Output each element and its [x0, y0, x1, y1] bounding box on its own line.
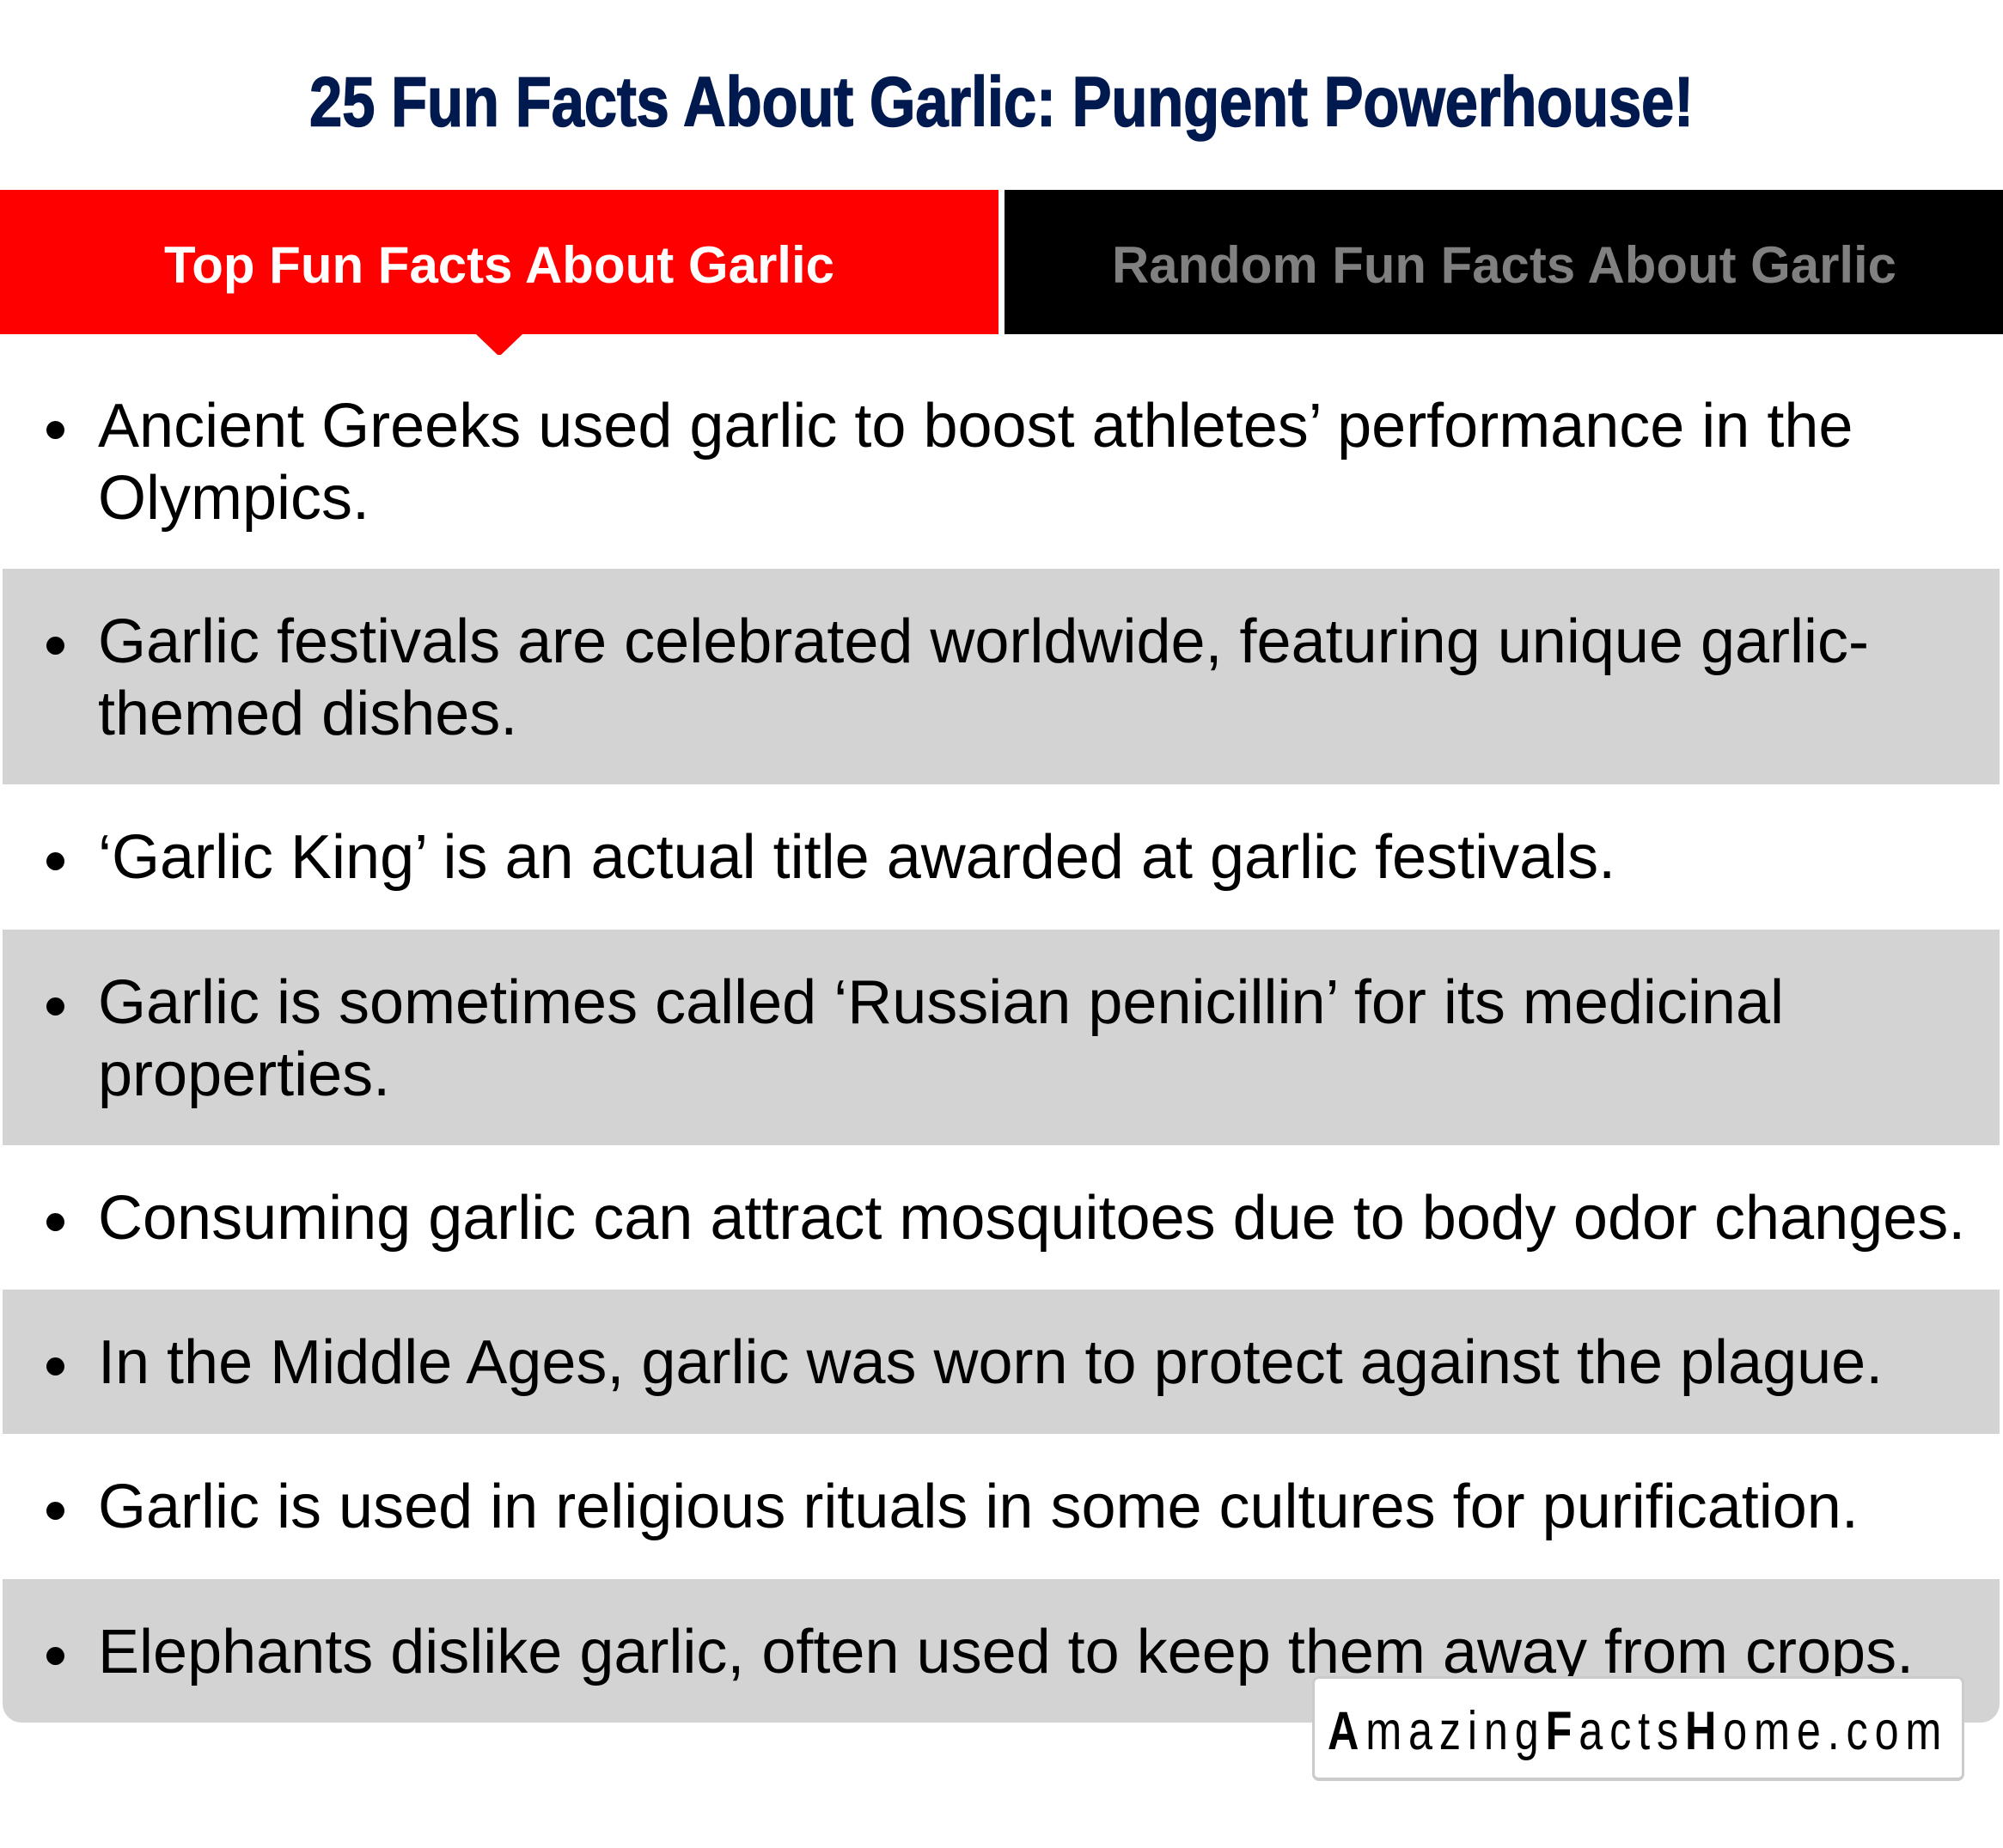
fact 8	[3, 1579, 2000, 1723]
tab: top fun facts (active)	[0, 190, 998, 355]
tab background	[0, 190, 998, 334]
active tab pointer	[476, 334, 522, 355]
fact 4: properties.	[98, 1040, 390, 1109]
fact 2: Garlic festivals are celebrated worldwide, featuring unique garlic-	[98, 607, 1869, 676]
tab label: Top Fun Facts About Garlic	[164, 236, 834, 294]
fact 1: Ancient Greeks used garlic to boost athletes’ performance in the	[98, 392, 1853, 460]
tab label: Random Fun Facts About Garlic	[1112, 236, 1896, 294]
fact 2	[3, 569, 2000, 784]
fact 2: themed dishes.	[98, 680, 517, 748]
fact 6	[3, 1290, 2000, 1434]
fact 5: Consuming garlic can attract mosquitoes due to body odor changes.	[98, 1184, 1965, 1253]
fact 4: Garlic is sometimes called ‘Russian penicillin’ for its medicinal	[98, 968, 1784, 1037]
fact 1	[46, 392, 1853, 533]
fact 8: Elephants dislike garlic, often used to keep them away from crops.	[98, 1618, 1914, 1686]
title: 25 Fun Facts About Garlic: Pungent Powerhouse!	[309, 63, 1694, 142]
fact 1: Olympics.	[98, 464, 369, 533]
fact 4	[3, 930, 2000, 1145]
watermark badge: AmazingFactsHome.com	[1328, 1701, 1941, 1761]
fact 3: ‘Garlic King’ is an actual title awarded at garlic festivals.	[98, 823, 1615, 892]
watermark badge	[1312, 1676, 1964, 1781]
tab: random fun facts (inactive)	[1005, 190, 2003, 334]
fact 6: In the Middle Ages, garlic was worn to protect against the plague.	[98, 1328, 1883, 1397]
fact 7: Garlic is used in religious rituals in some cultures for purification.	[98, 1473, 1859, 1541]
